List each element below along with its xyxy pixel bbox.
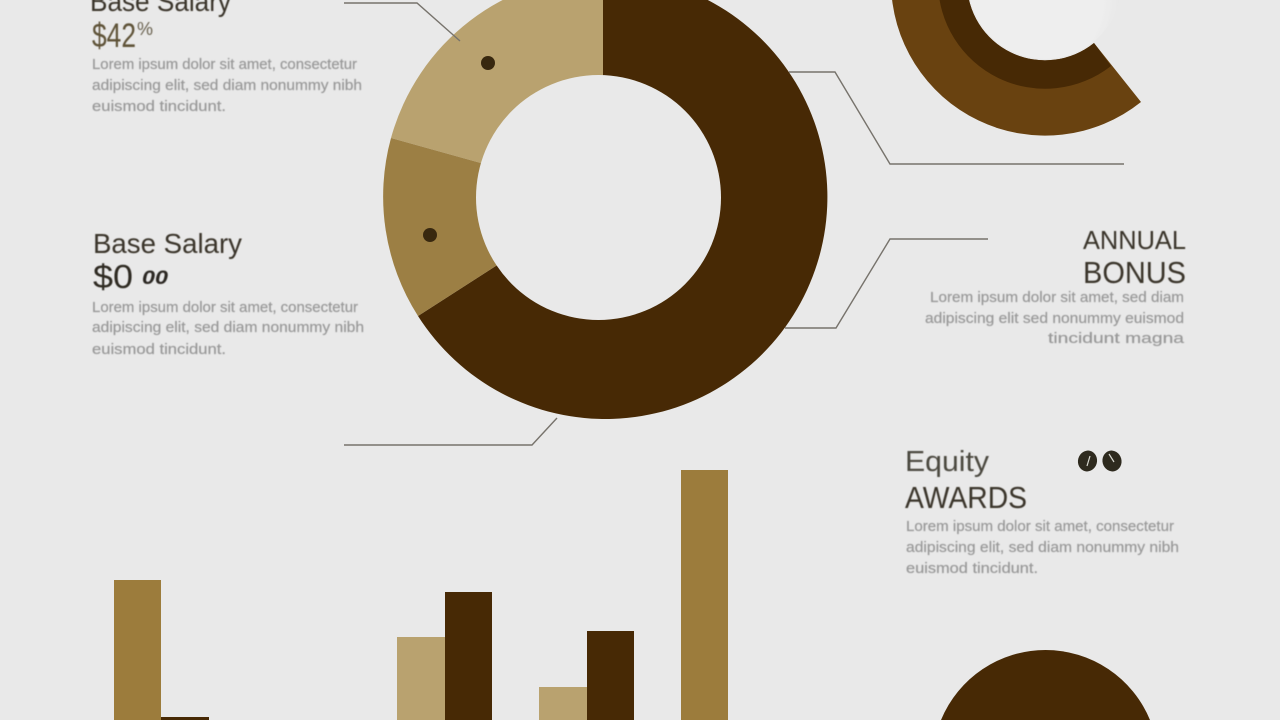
body text: annual bonus: tincidunt magna — [1048, 331, 1185, 347]
donut segment: dark majority — [418, 0, 827, 419]
donut chart — [383, 0, 827, 419]
heading: annual: ANNUAL — [1083, 225, 1186, 255]
value suffix: 00 — [142, 268, 169, 289]
body text: equity awards: Lorem ipsum dolor sit amet, consectetur — [906, 519, 1174, 535]
leader line: middle right — [785, 239, 988, 328]
panel: annual bonus text block — [925, 225, 1186, 347]
outer ring: brown — [891, 0, 1141, 136]
body text: annual bonus: adipiscing elit sed nonummy euismod — [925, 311, 1184, 327]
icon: coffee beans — [1076, 448, 1124, 474]
leader line: top left — [344, 3, 460, 41]
bar chart — [114, 470, 728, 720]
body text: equity awards: adipiscing elit, sed diam nonummy nibh — [906, 540, 1179, 556]
inner ring: dark brown — [938, 0, 1111, 89]
leader line: bottom left — [344, 418, 557, 445]
body text: annual bonus — [925, 290, 1185, 347]
body text: top salary: adipiscing elit, sed diam nonummy nibh — [92, 78, 362, 94]
body text: middle salary: euismod tincidunt. — [92, 342, 226, 358]
body text: equity awards — [906, 519, 1179, 577]
panel: base salary top text block — [90, 0, 362, 115]
dark semicircle bottom right — [941, 650, 1150, 720]
bar group 2 — [397, 592, 492, 720]
marker dot: light segment — [481, 56, 495, 70]
value: middle salary figure: $0 — [93, 258, 133, 295]
value suffix: % — [137, 19, 153, 39]
marker dot: mid segment — [423, 228, 437, 242]
inner pale circle — [968, 0, 1122, 59]
heading: equity: Equity — [905, 446, 990, 478]
value: top salary figure: $42 — [92, 17, 136, 55]
bar group 3 — [539, 631, 634, 720]
body text: top salary: Lorem ipsum dolor sit amet, consectetur — [92, 57, 357, 73]
bar group 1 — [114, 580, 209, 720]
panel: base salary middle text block — [92, 228, 364, 358]
donut segment: mid tan — [383, 138, 603, 316]
leader line: top right — [789, 72, 1124, 164]
body text: top salary: euismod tincidunt. — [92, 99, 226, 115]
body text: annual bonus: Lorem ipsum dolor sit amet, sed diam — [930, 290, 1184, 306]
panel: equity awards text block — [905, 446, 1179, 577]
body text: middle salary: adipiscing elit, sed diam nonummy nibh — [92, 320, 364, 336]
donut segment: light tan — [391, 0, 603, 197]
body text: middle salary — [92, 300, 364, 358]
bar group 4 — [681, 470, 728, 720]
heading: bonus: BONUS — [1083, 255, 1186, 290]
donut hole — [476, 75, 721, 320]
body text: middle salary: Lorem ipsum dolor sit amet, consectetur — [92, 300, 358, 316]
heading: awards: AWARDS — [905, 480, 1027, 515]
top right ring chart — [891, 0, 1141, 136]
body text: equity awards: euismod tincidunt. — [906, 561, 1038, 577]
heading: base salary middle: Base Salary — [93, 228, 242, 259]
body text: top salary — [92, 57, 362, 115]
